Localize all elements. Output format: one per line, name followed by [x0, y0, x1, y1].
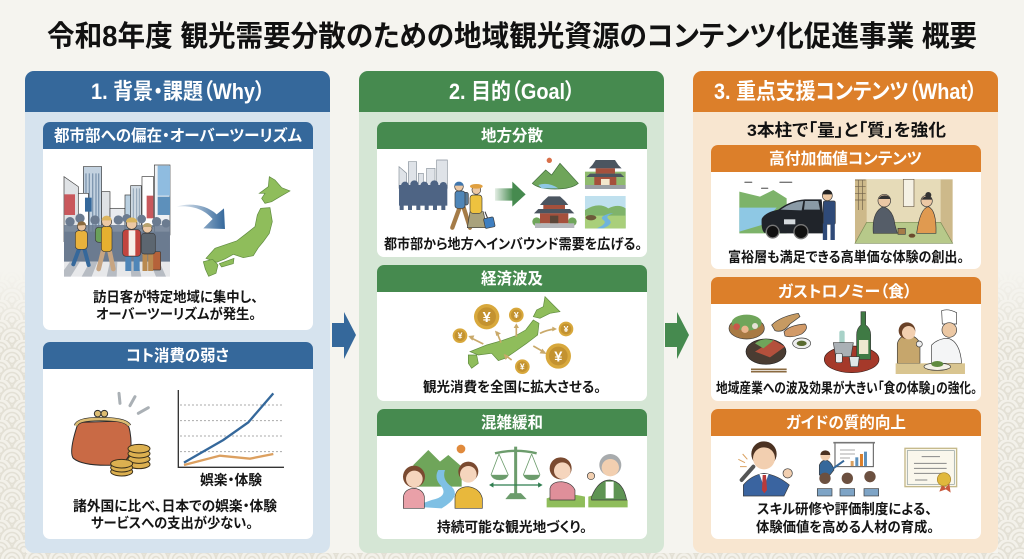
description: 諸外国に比べ、日本での娯楽・体験: [73, 498, 277, 514]
illustration: sake set: [824, 312, 879, 373]
description: [93, 289, 258, 322]
illustration: city crowd and travelers: [399, 160, 495, 229]
illustration: guide with microphone: [738, 441, 792, 496]
card: overtourism: [43, 122, 313, 330]
icon: balance scale: [489, 447, 542, 499]
panel: 2 goal: [359, 71, 664, 553]
chart label: 娯楽・体験: [200, 472, 262, 488]
description: 訪日客が特定地域に集中し、: [93, 289, 258, 305]
illustration: crowded city street: [64, 165, 170, 277]
description: サービスへの支出が少ない。: [91, 515, 253, 531]
icon: map of japan with yen coins: ¥: [520, 362, 525, 372]
card: regional dispersion: 地方分散: [481, 126, 543, 145]
illustration: local residents: [547, 454, 628, 507]
description: 観光消費を全国に拡大させる。: [423, 379, 601, 395]
panel heading: why: 1. 背景・課題（Why）: [91, 79, 265, 104]
panel: 3 priority content: [693, 71, 998, 553]
card: overtourism: 都市部への偏在・オーバーツーリズム: [54, 126, 303, 145]
card: weak experience spending: コト消費の弱さ: [126, 347, 229, 365]
icon: map of japan with yen coins: ¥: [483, 310, 492, 326]
icon: map of japan with yen coins: [453, 297, 573, 374]
icon: certificate: [905, 448, 957, 493]
icon: curved arrow toward japan: [177, 205, 225, 229]
description: [756, 501, 934, 535]
card: economic ripple: 経済波及: [481, 269, 543, 288]
card: regional dispersion: [377, 122, 647, 257]
panel heading: what: 3. 重点支援コンテンツ（What）: [714, 79, 977, 104]
line chart: entertainment and experience spending: [178, 390, 284, 467]
title: 令和8年度 観光需要分散のための地域観光資源のコンテンツ化促進事業 概要: [47, 20, 977, 53]
icon: coin purse with coins: [72, 393, 150, 476]
panel heading: why: [25, 71, 330, 112]
illustration: chauffeured car in landscape: [739, 182, 835, 240]
tagline: 3本柱で「量」と「質」を強化: [747, 121, 946, 140]
illustration: tea ceremony room: [855, 179, 953, 243]
description: 持続可能な観光地づくり。: [437, 519, 587, 535]
icon: map of japan with yen coins: ¥: [564, 324, 569, 334]
description: スキル研修や評価制度による、: [757, 501, 932, 517]
card: gastronomy: [711, 277, 981, 401]
description: 体験価値を高める人材の育成。: [756, 519, 934, 535]
illustration: chef and guest: [896, 310, 965, 374]
panel heading: what: [693, 71, 998, 112]
description: 都市部から地方へインバウンド需要を広げる。: [384, 236, 642, 252]
illustration: presentation training: [817, 443, 879, 496]
icon: arrow to regions: [495, 182, 526, 207]
description: 地域産業への波及効果が大きい「食の体験」の強化。: [716, 380, 977, 396]
card: economic ripple: [377, 265, 647, 401]
icon: map of japan with yen coins: ¥: [514, 310, 519, 320]
card: weak experience spending: [43, 342, 313, 539]
illustration: tourists in nature: [403, 445, 482, 508]
arrow: goal to what: [665, 312, 689, 359]
card: congestion relief: [377, 409, 647, 539]
description: 富裕層も満足できる高単価な体験の創出。: [728, 249, 964, 265]
panel heading: goal: 2. 目的（Goal）: [449, 79, 575, 104]
card: gastronomy: ガストロノミー（食）: [778, 282, 912, 301]
panel heading: goal: [359, 71, 664, 112]
card: high value content: 高付加価値コンテンツ: [769, 149, 922, 168]
icon: map of japan with yen coins: ¥: [554, 349, 563, 365]
card: high value content: [711, 145, 981, 269]
description: オーバーツーリズムが発生。: [96, 306, 256, 322]
panel: 1 background and issues: [25, 71, 330, 553]
arrow: why to goal: [332, 312, 356, 359]
card: congestion relief: 混雑緩和: [481, 414, 543, 432]
icon: map of japan: [203, 177, 290, 276]
card: guide quality: ガイドの質的向上: [786, 414, 906, 432]
icon: map of japan with yen coins: ¥: [458, 331, 463, 341]
description: [73, 498, 277, 531]
illustration: local food: [729, 313, 811, 372]
icons: regional destinations: [532, 158, 626, 228]
card: guide quality: [711, 409, 981, 539]
